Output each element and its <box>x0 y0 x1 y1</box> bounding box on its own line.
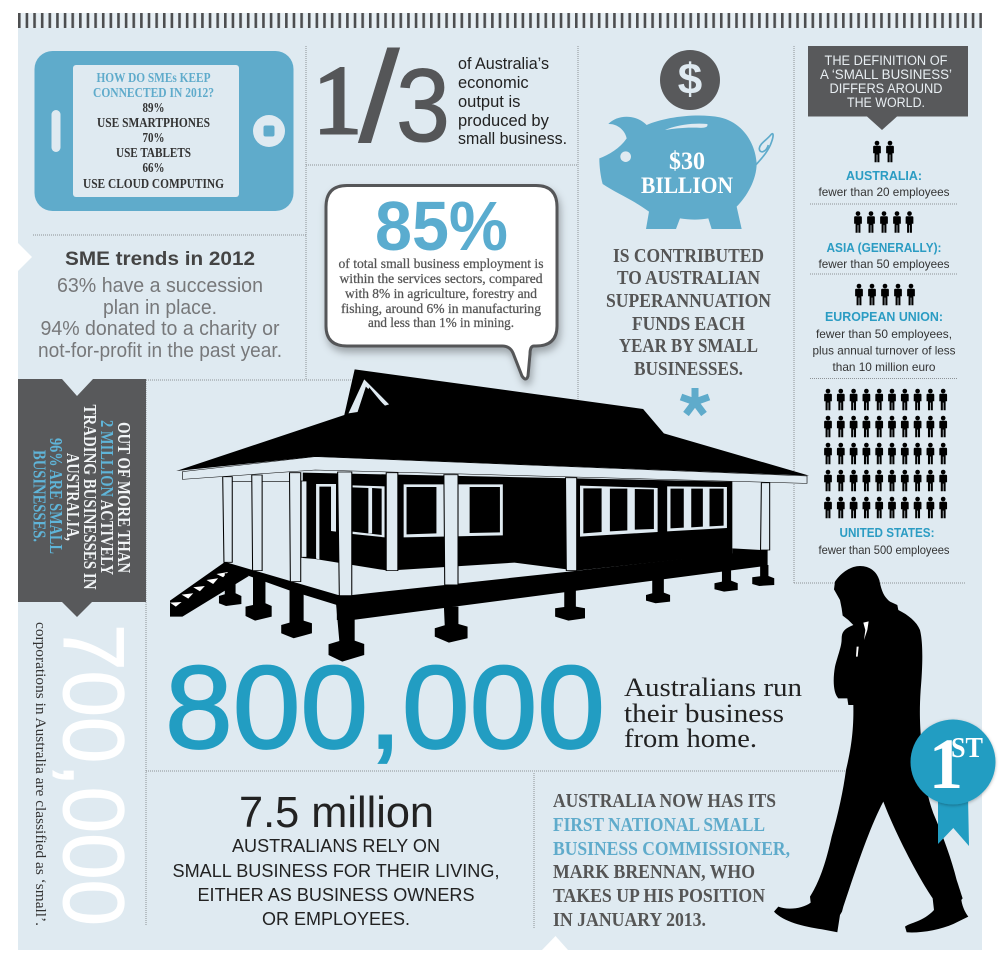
superannuation text block: FUNDS EACH <box>632 313 745 335</box>
commissioner text block: AUSTRALIA NOW HAS ITS <box>553 790 776 812</box>
superannuation text block <box>606 245 771 380</box>
Asia label: ASIA (GENERALLY): <box>826 241 942 255</box>
door and windows <box>316 483 761 559</box>
one third statistic: 3 <box>396 48 450 164</box>
7.5 million statistic <box>172 788 500 929</box>
icon: piggy bank: BILLION <box>641 173 733 199</box>
icon: coin: $ <box>678 55 702 104</box>
panel: smartphone: 70% <box>142 130 164 145</box>
7.5 million statistic: EITHER AS BUSINESS OWNERS <box>198 884 474 905</box>
callout: 2 million businesses: AUSTRALIA, <box>63 453 83 541</box>
Australia label: fewer than 20 employees <box>818 185 950 199</box>
one third statistic: output is <box>458 93 520 111</box>
commissioner text block: MARK BRENNAN, WHO <box>553 861 755 883</box>
SME trends text block: 94% donated to a charity or <box>40 318 280 340</box>
man silhouette <box>774 566 968 932</box>
800,000 statistic <box>165 642 802 774</box>
700,000 rotated statistic: corporations in Australia are classified as ‘small’. <box>32 622 48 926</box>
badge: 1st ribbon: ST <box>951 733 983 764</box>
commissioner text block: TAKES UP HIS POSITION <box>553 885 765 907</box>
people: Asia <box>854 211 913 233</box>
commissioner text block: FIRST NATIONAL SMALL <box>553 814 765 836</box>
SME trends text block: 63% have a succession <box>57 275 263 297</box>
stairs <box>170 563 249 617</box>
people: United States <box>824 389 947 518</box>
one third statistic: / <box>359 26 399 169</box>
house illustration <box>170 369 809 662</box>
United States label: fewer than 500 employees <box>818 543 950 557</box>
icon: piggy bank <box>599 115 773 229</box>
800,000 statistic: Australians run <box>624 673 802 702</box>
deck beam <box>224 548 768 620</box>
badge: 1st ribbon: 1 <box>929 724 963 804</box>
callout: 2 million businesses: 96% ARE SMALL <box>46 438 66 554</box>
gable <box>348 379 389 413</box>
SME trends text block: plan in place. <box>103 297 217 319</box>
superannuation text block: SUPERANNUATION <box>606 290 771 312</box>
callout: definition of small business: THE DEFINITION OF <box>824 53 948 68</box>
icon: asterisk <box>681 388 709 414</box>
SME trends text block <box>38 248 282 362</box>
panel: smartphone: 89% <box>142 100 164 115</box>
superannuation text block: BUSINESSES. <box>634 358 743 380</box>
badge: 1st ribbon <box>910 720 996 846</box>
speech bubble: 85%: of total small business employment is <box>338 256 544 271</box>
piers <box>219 565 774 662</box>
callout: definition of small business: A ‘SMALL BUSINESS’ <box>820 67 952 82</box>
top tick strip <box>18 13 982 28</box>
icon: coin <box>660 50 720 110</box>
speech bubble: 85%: with 8% in agriculture, forestry and <box>345 286 537 301</box>
Australia label <box>818 169 950 199</box>
icon: piggy bank: $30 <box>669 148 705 175</box>
European Union label: fewer than 50 employees, <box>816 327 952 341</box>
800,000 statistic: their business <box>624 699 784 728</box>
commissioner text block: IN JANUARY 2013. <box>553 909 706 931</box>
speech bubble: 85%: fishing, around 6% in manufacturing <box>341 301 541 316</box>
700,000 rotated statistic: 700,000 <box>45 624 141 926</box>
callout: definition of small business: DIFFERS AROUND <box>830 81 943 96</box>
roof <box>176 369 809 476</box>
panel: smartphone: 66% <box>142 160 164 175</box>
callout: 2 million businesses <box>18 379 146 617</box>
7.5 million statistic: SMALL BUSINESS FOR THEIR LIVING, <box>172 860 500 881</box>
Australia label: AUSTRALIA: <box>846 169 922 183</box>
European Union label: EUROPEAN UNION: <box>825 310 943 324</box>
left veranda posts and walls <box>232 482 301 561</box>
panel: smartphone: USE CLOUD COMPUTING <box>83 176 224 191</box>
speech bubble: 85%: within the services sectors, compared <box>340 271 543 286</box>
one third statistic: small business. <box>458 130 567 148</box>
verandah posts <box>223 472 770 596</box>
United States label: UNITED STATES: <box>840 526 934 540</box>
callout: 2 million businesses: BUSINESSES. <box>30 450 50 542</box>
7.5 million statistic: OR EMPLOYEES. <box>262 908 410 929</box>
one third statistic: produced by <box>458 112 550 130</box>
callout: definition of small business <box>808 46 968 130</box>
one third statistic: of Australia’s <box>458 55 549 73</box>
SME trends text block: SME trends in 2012 <box>65 248 255 270</box>
people: Australia <box>873 141 894 162</box>
wall <box>303 473 732 571</box>
superannuation text block: YEAR BY SMALL <box>619 335 758 357</box>
panel: smartphone: USE TABLETS <box>116 145 191 160</box>
7.5 million statistic: AUSTRALIANS RELY ON <box>232 835 440 856</box>
panel: smartphone: CONNECTED IN 2012? <box>93 85 214 100</box>
speech bubble: 85% <box>326 186 557 379</box>
SME trends text block: not-for-profit in the past year. <box>38 340 282 362</box>
callout: 2 million businesses: OUT OF MORE THAN <box>114 422 134 573</box>
superannuation text block: IS CONTRIBUTED <box>613 245 764 267</box>
commissioner text block <box>553 790 790 931</box>
one third statistic: 1 <box>313 47 362 155</box>
callout: 2 million businesses: 2 MILLION ACTIVELY <box>97 420 117 575</box>
United States label <box>818 526 950 557</box>
speech bubble: 85%: and less than 1% in mining. <box>368 315 514 330</box>
people: European Union <box>855 284 915 305</box>
one third statistic <box>313 26 567 169</box>
Asia label <box>818 241 950 271</box>
7.5 million statistic: 7.5 million <box>239 788 434 837</box>
800,000 statistic: 800,000 <box>165 642 605 774</box>
callout: definition of small business: THE WORLD. <box>847 95 925 110</box>
one third statistic: economic <box>458 74 529 92</box>
notches in panel edge <box>18 243 568 950</box>
panel: smartphone <box>34 51 294 211</box>
Asia label: fewer than 50 employees <box>818 257 950 271</box>
speech bubble: 85%: 85% <box>375 187 508 265</box>
commissioner text block: BUSINESS COMMISSIONER, <box>553 838 790 860</box>
European Union label: than 10 million euro <box>832 360 936 374</box>
European Union label: plus annual turnover of less <box>812 344 956 358</box>
superannuation text block: TO AUSTRALIAN <box>617 267 760 289</box>
800,000 statistic: from home. <box>624 724 757 753</box>
panel: smartphone: HOW DO SMEs KEEP <box>96 70 210 85</box>
callout: 2 million businesses: TRADING BUSINESSES IN <box>80 404 100 590</box>
panel: smartphone: USE SMARTPHONES <box>97 115 210 130</box>
European Union label <box>812 310 956 374</box>
